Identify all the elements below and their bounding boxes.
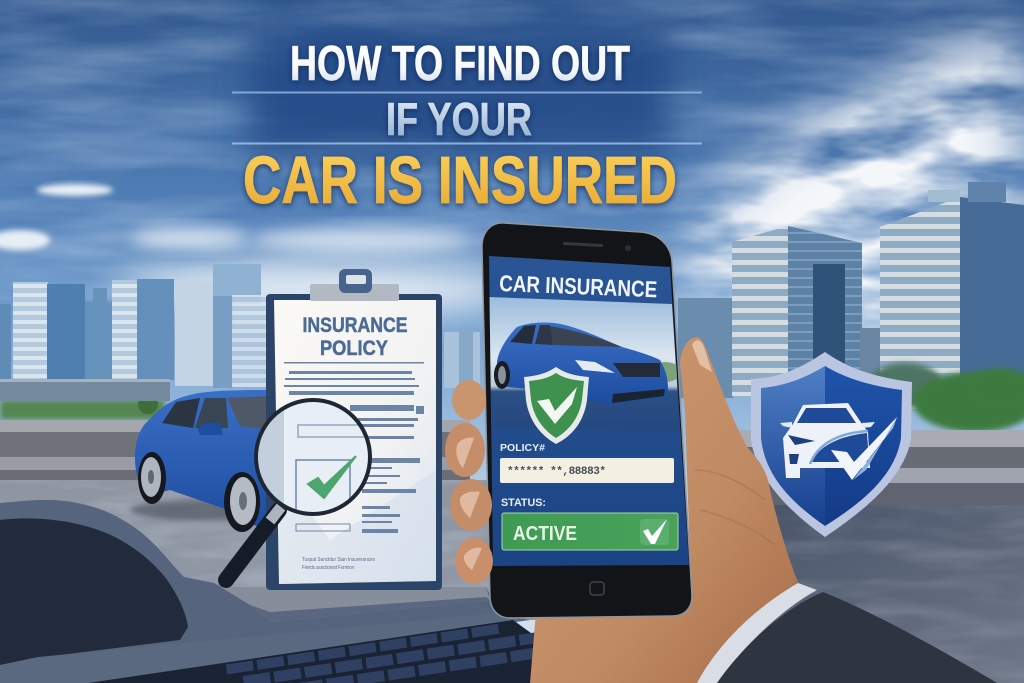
blue car shield badge	[751, 352, 912, 537]
title: HOW TO FIND OUT	[290, 37, 630, 91]
policy number label: POLICY#	[500, 442, 545, 454]
icon: car with check mark	[780, 403, 897, 480]
phone screen	[485, 250, 695, 570]
policy text lines	[284, 362, 424, 533]
fingers gripping phone	[445, 380, 493, 584]
clipboard clip	[310, 269, 399, 301]
policy number field: ****** **,88883*	[507, 466, 606, 478]
green check shield	[524, 367, 589, 444]
active status button	[502, 513, 678, 550]
trees	[0, 363, 1024, 432]
clipboard: insurance policy	[266, 269, 442, 590]
laptop dashboard foreground	[0, 500, 600, 683]
app photo of car	[489, 297, 681, 432]
magnifying glass	[226, 400, 375, 580]
parapet wall and ground	[0, 420, 1024, 683]
title	[243, 37, 677, 218]
policy fine print: Tuspat Sanctdur Sian Insurerances	[302, 557, 375, 563]
title: IF YOUR	[386, 93, 532, 145]
status label: STATUS:	[501, 497, 546, 509]
city skyline left	[0, 264, 480, 388]
policy fine print: Fiends sanctioned Formion	[302, 565, 354, 571]
policy heading	[302, 314, 408, 360]
policy heading: INSURANCE	[302, 314, 408, 337]
policy fine print	[302, 557, 375, 571]
app header: car insurance: CAR INSURANCE	[499, 270, 658, 302]
laptop keyboard	[88, 620, 600, 683]
title divider lines	[232, 92, 702, 144]
city skyline right	[678, 182, 1024, 410]
sleeve cuff and suit	[697, 583, 997, 683]
active status button: ACTIVE	[513, 523, 577, 545]
hand holding phone	[530, 337, 997, 683]
policy heading: POLICY	[320, 337, 388, 360]
smartphone	[482, 223, 695, 618]
title: CAR IS INSURED	[243, 143, 677, 218]
title backdrop band	[250, 25, 670, 155]
policy number field	[500, 458, 674, 483]
car parked behind clipboard	[130, 390, 275, 532]
